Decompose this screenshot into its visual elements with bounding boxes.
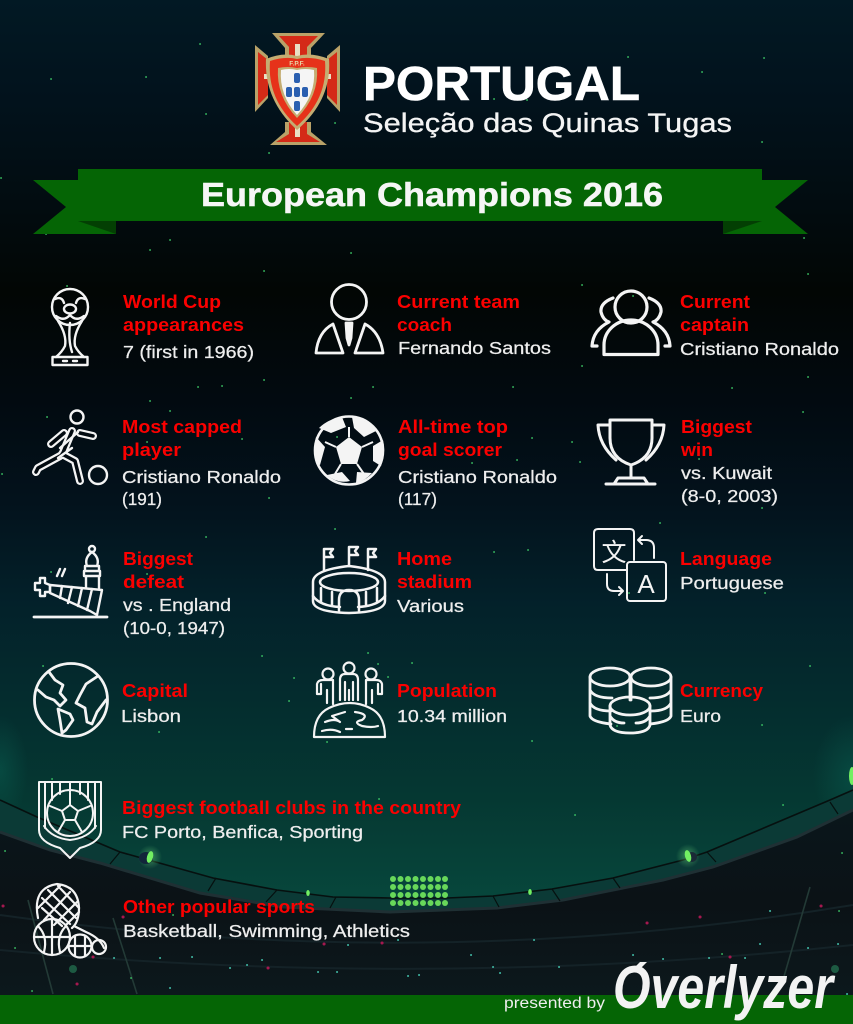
presented by: presented by <box>504 995 605 1012</box>
value <box>681 463 778 506</box>
panel: Language <box>594 529 784 601</box>
heading: coach <box>397 315 452 335</box>
Portugal federation crest: F.P.F. <box>289 60 305 68</box>
icon: club shield <box>39 782 101 858</box>
panel: Home stadium <box>313 547 472 616</box>
value: Fernando Santos <box>398 338 551 358</box>
heading <box>123 292 244 335</box>
heading: appearances <box>123 315 244 335</box>
icon: trophy cup <box>598 420 664 484</box>
value: 7 (first in 1966) <box>123 342 254 362</box>
value: vs . England <box>123 595 231 615</box>
value: Basketball, Swimming, Athletics <box>123 921 410 941</box>
heading: defeat <box>123 572 184 592</box>
heading: captain <box>680 315 749 335</box>
heading: Current team <box>397 292 520 312</box>
icon: football <box>314 416 384 484</box>
banner: European Champions 2016 <box>33 169 808 234</box>
heading: player <box>122 440 181 460</box>
title <box>363 58 732 138</box>
value: Portuguese <box>680 573 784 593</box>
icon: translate: 文 <box>601 533 627 569</box>
heading <box>123 549 193 592</box>
value: (191) <box>122 489 162 509</box>
panel: Biggest football clubs <box>39 782 461 858</box>
icon: chess pieces <box>34 546 107 617</box>
heading: Capital <box>122 681 188 701</box>
heading <box>398 417 508 460</box>
heading: goal scorer <box>398 440 502 460</box>
icon: sports balls <box>34 884 106 958</box>
Portugal federation crest <box>255 33 340 145</box>
heading: World Cup <box>123 292 221 312</box>
title: PORTUGAL: PORTUGAL <box>363 58 640 111</box>
heading: win <box>680 440 713 460</box>
heading: stadium <box>397 572 472 592</box>
value: Cristiano Ronaldo <box>398 467 557 487</box>
footer bar <box>0 995 853 1024</box>
value <box>398 467 557 509</box>
panel: Most capped player <box>36 410 281 509</box>
floodlight grid <box>390 876 448 906</box>
heading <box>680 292 750 335</box>
value <box>123 595 231 638</box>
heading: Biggest <box>681 417 752 437</box>
icon: world cup trophy <box>52 289 88 365</box>
icon: coin stacks <box>590 668 671 733</box>
icon: captain <box>592 291 670 354</box>
value: vs. Kuwait <box>681 463 772 483</box>
heading <box>397 549 472 592</box>
panel: Other popular sports <box>34 884 410 958</box>
panel: Biggest defeat <box>34 546 231 638</box>
heading: Other popular sports <box>123 897 315 917</box>
value: 10.34 million <box>397 706 507 726</box>
value: Cristiano Ronaldo <box>122 467 281 487</box>
heading: Biggest football clubs in the country <box>122 798 461 818</box>
value: Cristiano Ronaldo <box>680 339 839 359</box>
panel: Currency <box>590 668 763 733</box>
icon: player kicking ball <box>36 410 107 484</box>
heading <box>397 292 520 335</box>
heading: Currency <box>680 681 763 701</box>
footer: presented by Overlyzer <box>504 954 836 1021</box>
panel: Capital <box>34 664 188 736</box>
panel: Current team coach <box>316 284 551 358</box>
heading: Home <box>397 549 452 569</box>
heading <box>680 417 752 460</box>
heading: All-time top <box>398 417 508 437</box>
value: Various <box>397 596 464 616</box>
stadium illustration <box>0 715 853 996</box>
panel: Population <box>314 662 507 737</box>
heading: Current <box>680 292 750 312</box>
banner: European Champions 2016: European Champions 2016 <box>201 176 663 213</box>
value: (8-0, 2003) <box>681 486 778 506</box>
value: Euro <box>680 706 721 726</box>
heading: Population <box>397 681 497 701</box>
panel: Current captain <box>592 291 839 359</box>
icon: people on globe <box>314 662 385 737</box>
heading: Language <box>680 549 772 569</box>
panel: World Cup appearances <box>52 289 254 365</box>
icon: stadium <box>313 547 385 613</box>
value: (10-0, 1947) <box>123 618 225 638</box>
panel: Biggest win <box>598 417 778 506</box>
value: (117) <box>398 489 437 509</box>
icon: globe <box>34 664 108 736</box>
value: FC Porto, Benfica, Sporting <box>122 822 363 842</box>
icon: coach <box>316 284 383 353</box>
heading: Biggest <box>123 549 193 569</box>
value <box>122 467 281 509</box>
heading: Most capped <box>122 417 242 437</box>
heading <box>122 417 242 460</box>
icon: translate: A <box>637 569 655 599</box>
panel: All-time top goal scorer <box>314 416 557 509</box>
subtitle: Seleção das Quinas Tugas <box>363 108 732 138</box>
icon: translate <box>594 529 666 601</box>
value: Lisbon <box>121 706 181 726</box>
